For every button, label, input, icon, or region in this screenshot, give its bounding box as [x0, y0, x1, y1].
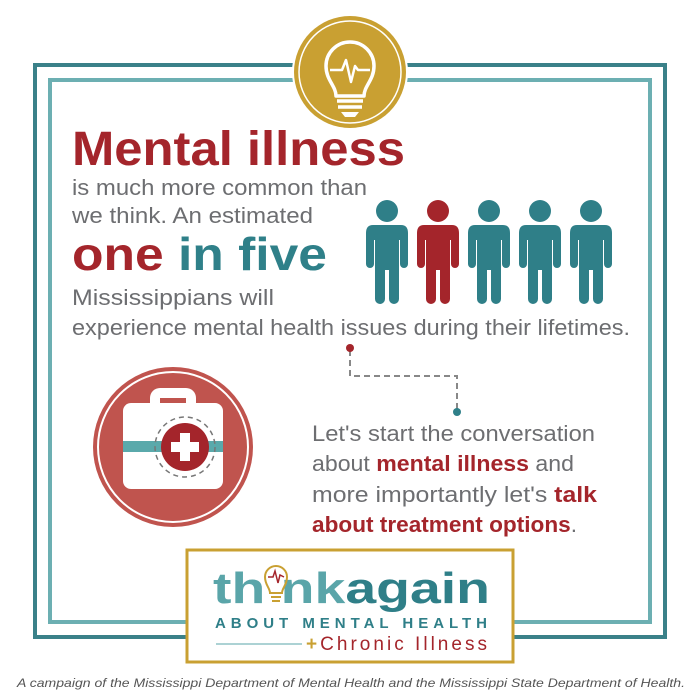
- logo: think again: +Chronic Illness: [306, 634, 487, 655]
- text block: Mississippians: [72, 285, 630, 340]
- text block: call to action: about mental illness and: [312, 451, 574, 476]
- logo: think again: think again: [213, 564, 490, 613]
- icon: first aid kit badge: [93, 367, 253, 527]
- text block: call to action: [312, 421, 598, 537]
- text block: call to action: about treatment options .: [312, 512, 577, 537]
- arrow: dashed connector: [346, 344, 461, 416]
- icon: light bulb badge: [292, 14, 408, 130]
- logo: think again: [187, 550, 513, 662]
- text block: intro: [71, 175, 367, 228]
- text block: intro: is much more common than: [72, 175, 367, 200]
- icon: five people, one highlighted: [366, 200, 612, 304]
- text block: intro: we think. An estimated: [71, 203, 313, 228]
- text block: Mississippians: Mississippians will: [72, 285, 274, 310]
- frame: [35, 65, 665, 637]
- footer credit: A campaign of the Mississippi Department of Mental Health and the Mississippi State Department of Health.: [16, 676, 685, 690]
- heading: Mental illness: Mental illness: [72, 123, 405, 176]
- text block: call to action: Let's start the conversation: [312, 421, 595, 446]
- heading: one in five: one in five: [72, 228, 327, 280]
- text block: call to action: more importantly let's talk: [312, 482, 598, 507]
- logo: think again: ABOUT MENTAL HEALTH: [215, 615, 487, 632]
- text block: Mississippians: experience mental health issues during their lifetimes.: [72, 315, 630, 340]
